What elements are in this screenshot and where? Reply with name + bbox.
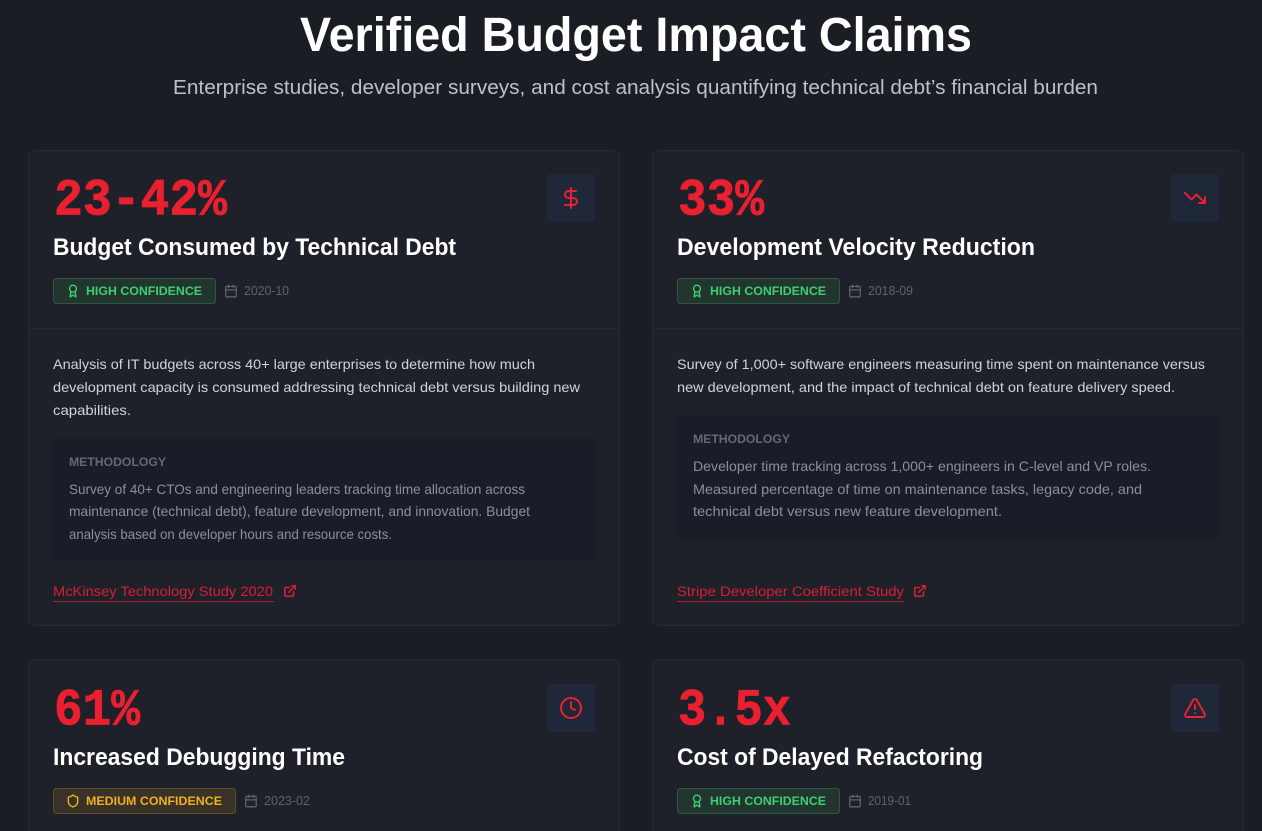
badge: high confidence: HIGH CONFIDENCE [710,284,826,298]
methodology box: maintenance (technical debt), feature development, and innovation. Budget [69,503,530,519]
date [850,794,911,808]
description: new development, and the impact of technical debt on feature delivery speed. [677,379,1175,395]
icon: trending down [1171,174,1219,222]
methodology box [53,438,595,561]
icon: clock [547,684,595,732]
badge: high confidence: HIGH CONFIDENCE [86,284,202,298]
description: Analysis of IT budgets across 40+ large enterprises to determine how much [53,356,535,372]
source link: Stripe Developer Coefficient Study [677,583,904,599]
heading: Development Velocity Reduction [677,234,1035,261]
subtitle: Enterprise studies, developer surveys, and cost analysis quantifying technical debt’s financial burden [173,77,1098,99]
icon: warning triangle [1171,684,1219,732]
stat: 23-42%: 23-42% [54,171,227,230]
panel: budget consumed by technical debt [28,150,620,626]
panel: cost of delayed refactoring [652,660,1244,831]
icon: dollar sign [547,174,595,222]
description: capabilities. [53,402,131,418]
methodology box: METHODOLOGY [693,432,790,446]
badge: high confidence [678,278,840,304]
methodology box: analysis based on developer hours and resource costs. [69,526,392,542]
description: Survey of 1,000+ software engineers measuring time spent on maintenance versus [677,356,1205,372]
description [677,356,1205,395]
title: Verified Budget Impact Claims [300,9,972,62]
badge: medium confidence [54,788,236,814]
stat: 3.5x: 3.5x [678,681,791,740]
heading: Cost of Delayed Refactoring [677,744,983,771]
date: 2023-02 [264,794,310,808]
stat: 33%: 33% [678,171,764,230]
badge: medium confidence: MEDIUM CONFIDENCE [86,794,222,808]
heading: Budget Consumed by Technical Debt [53,234,456,261]
methodology box: Survey of 40+ CTOs and engineering leaders tracking time allocation across [69,481,525,497]
description [53,356,581,418]
methodology box: Developer time tracking across 1,000+ engineers in C-level and VP roles. [693,458,1151,474]
methodology box: METHODOLOGY [69,455,166,469]
panel: increased debugging time [28,660,620,831]
description: development capacity is consumed addressing technical debt versus building new [53,379,581,395]
source link: McKinsey Technology Study 2020 [53,583,273,599]
methodology box: technical debt versus new feature development. [693,503,1002,519]
badge: high confidence: HIGH CONFIDENCE [710,794,826,808]
methodology box: Measured percentage of time on maintenance tasks, legacy code, and [693,481,1142,497]
panel: development velocity reduction [652,150,1244,626]
stat: 61%: 61% [54,681,140,740]
methodology box [677,415,1219,539]
date: 2018-09 [868,284,913,298]
heading: Increased Debugging Time [53,744,345,771]
date: 2019-01 [868,794,911,808]
date: 2020-10 [244,284,289,298]
badge: high confidence [54,278,216,304]
badge: high confidence [678,788,840,814]
